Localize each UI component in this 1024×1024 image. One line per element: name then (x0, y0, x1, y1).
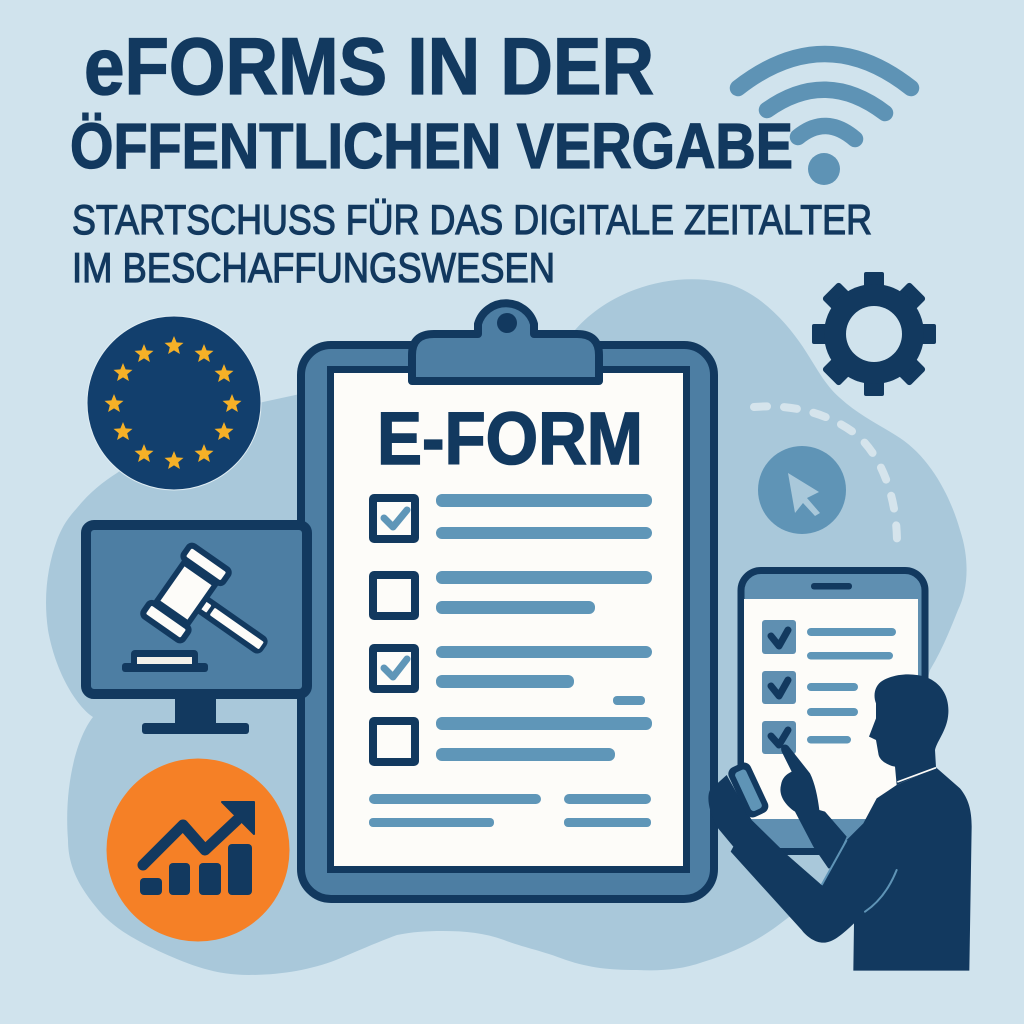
dashed cursor path (754, 406, 897, 543)
subtitle (72, 196, 872, 291)
tablet checkboxes (762, 620, 796, 754)
tablet speaker (811, 583, 852, 590)
panel: tablet (741, 570, 925, 852)
subtitle: STARTSCHUSS FÜR DAS DIGITALE ZEITALTER (72, 196, 872, 243)
icon: wifi (738, 54, 911, 185)
form checkboxes (373, 498, 415, 762)
icon: EU flag circle (87, 316, 261, 490)
person head (869, 674, 948, 785)
clipboard clip (412, 303, 599, 381)
gavel (137, 540, 291, 686)
icon: growth chart (106, 758, 290, 942)
background blob (46, 279, 967, 975)
subtitle: IM BESCHAFFUNGSWESEN (72, 244, 555, 291)
form text lines (369, 494, 652, 827)
person silhouette (708, 674, 972, 971)
panel: clipboard (301, 303, 714, 899)
icon: monitor with gavel (86, 525, 307, 734)
person pointing hand (780, 744, 847, 868)
person body (708, 767, 972, 971)
title (70, 22, 793, 182)
collar and suit highlights (822, 768, 936, 912)
icon: cursor (758, 446, 846, 534)
gavel base (122, 650, 208, 672)
tablet text lines (807, 628, 896, 744)
form heading: E-FORM (377, 397, 643, 480)
icon: gear (812, 272, 936, 396)
tablet check marks (771, 630, 788, 745)
title: eFORMS IN DER (84, 22, 654, 112)
title: ÖFFENTLICHEN VERGABE (70, 110, 793, 182)
handheld device (726, 760, 771, 820)
form check marks (384, 510, 407, 677)
